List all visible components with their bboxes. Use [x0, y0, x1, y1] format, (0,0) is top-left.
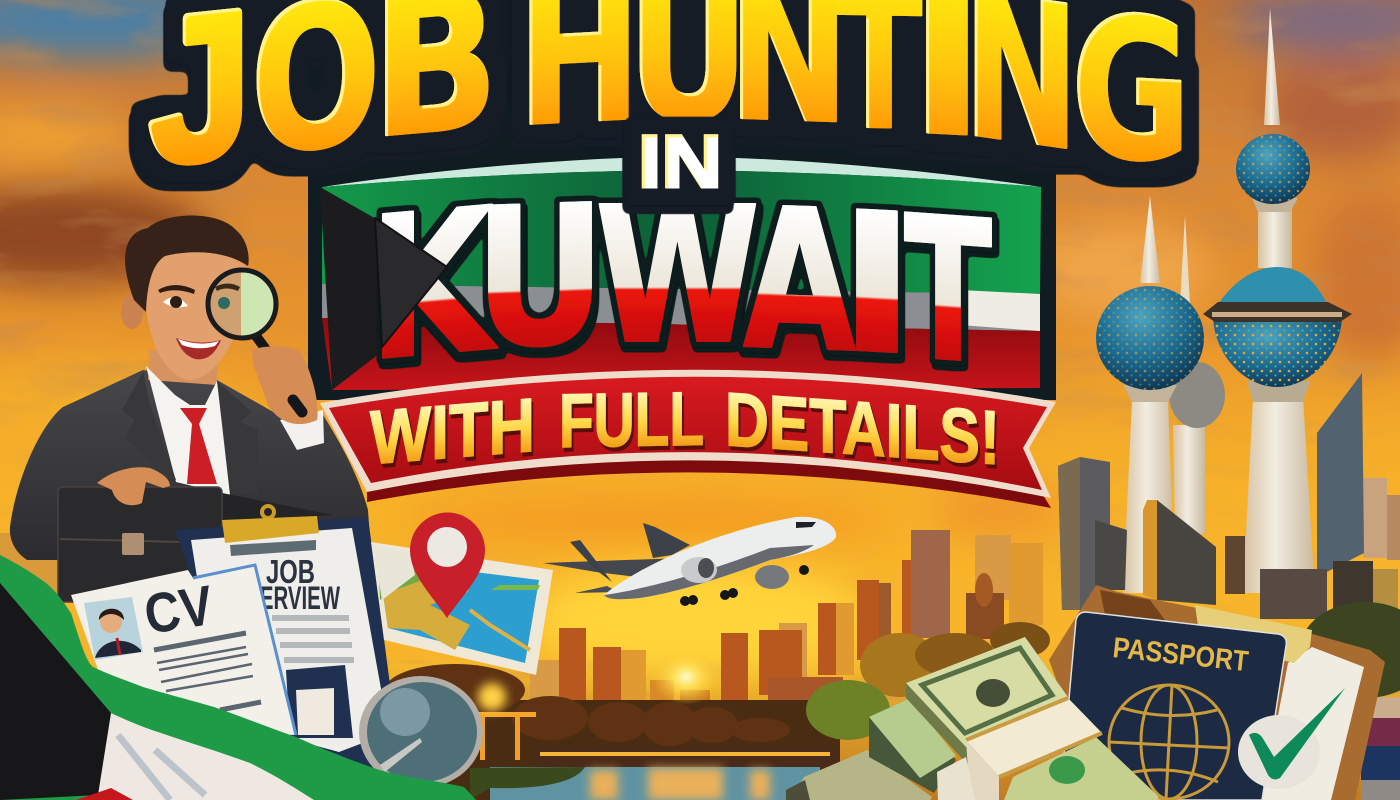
word: Kuwait: [368, 164, 992, 409]
highlight band: [322, 156, 1041, 187]
rear grey tower: [1169, 215, 1225, 534]
word: In: IN: [638, 120, 722, 203]
ribbon body: [329, 377, 1047, 490]
trees at right of skyline: [806, 622, 1050, 740]
neck: [148, 350, 218, 385]
word: Kuwait: U: [474, 164, 606, 392]
stack of cash: [786, 637, 1158, 800]
airplane: [543, 517, 836, 606]
skyscrapers: [1058, 373, 1398, 619]
title: Job Hunting: [150, 0, 1191, 207]
lower right bills: [1004, 737, 1158, 800]
businessman with magnifying glass: [10, 216, 370, 560]
white stripe: [322, 284, 1040, 331]
passport: [1060, 612, 1286, 800]
Kuwait flag banner: [320, 156, 1041, 390]
green stripe: [322, 170, 1041, 294]
hair: [125, 216, 249, 312]
Kuwait towers and buildings: [1058, 8, 1400, 800]
ear: [121, 295, 143, 329]
word: Kuwait: W: [595, 167, 760, 386]
lapels: [122, 372, 258, 495]
handle end: [293, 400, 302, 412]
medium tower: [1096, 196, 1204, 593]
ribbon text: FULL: [559, 376, 704, 464]
left eye: [158, 285, 195, 308]
shirt: [146, 366, 230, 495]
map with location pin: [371, 512, 553, 675]
flag black triangle: [375, 218, 447, 347]
magnifying glass on desk: [359, 676, 483, 788]
magnifier handle: [256, 336, 270, 355]
document: job interview clipboard: [175, 506, 403, 770]
passport: PASSPORT: [1111, 632, 1250, 678]
document: CV: [71, 565, 296, 735]
checklist clipboard: [1049, 585, 1385, 800]
tall tower: [1203, 8, 1352, 593]
cuff: [280, 410, 324, 450]
plane engines: [681, 557, 789, 589]
word: Kuwait: T: [904, 173, 992, 409]
distant city skyline: [0, 530, 1050, 800]
lake water: [470, 752, 830, 800]
landing gear: [680, 565, 809, 606]
foliage at far right: [1300, 602, 1400, 698]
ribbon text: WITH: [370, 383, 535, 481]
hand: [252, 346, 318, 424]
face: [145, 249, 248, 380]
red stripe: [322, 318, 1040, 390]
Kuwait flag foreground: [0, 555, 476, 800]
document: CV: CV: [140, 573, 217, 646]
CV photo: [84, 597, 143, 660]
top bills: [906, 637, 1068, 765]
location pin: [410, 512, 485, 618]
lower bills: [790, 750, 932, 800]
flag strip at far right: [1361, 697, 1400, 800]
waterfront pavilion: [476, 683, 536, 760]
document: job interview clipboard: JOB: [266, 553, 315, 590]
clip: [222, 506, 319, 543]
currency band: [966, 698, 1102, 777]
ribbon: With Full Details: [320, 370, 1056, 508]
magnifier lens: [208, 270, 276, 338]
word: Kuwait: I: [838, 170, 916, 399]
black hoist band: [320, 187, 384, 390]
ribbon edge: [320, 370, 1056, 498]
briefcase: [58, 467, 333, 602]
word: Kuwait: A: [743, 166, 856, 396]
suit jacket: [10, 370, 370, 560]
ribbon text: [370, 376, 1000, 481]
pale background buildings: [1363, 478, 1400, 560]
globe: [1109, 685, 1229, 799]
hand on briefcase: [97, 467, 170, 505]
mouth: [176, 338, 221, 359]
ribbon text: DETAILS!: [725, 377, 1000, 481]
word: Kuwait: K: [368, 165, 498, 406]
shadow plate behind title and banner: [262, 0, 1120, 400]
necktie: [180, 408, 217, 484]
waterfront promenade: [535, 747, 840, 767]
check mark badge: [1238, 688, 1345, 789]
ribbon shadow: [367, 450, 1051, 508]
document: job interview clipboard: INTERVIEW: [227, 580, 341, 616]
middle bills: [869, 698, 956, 793]
